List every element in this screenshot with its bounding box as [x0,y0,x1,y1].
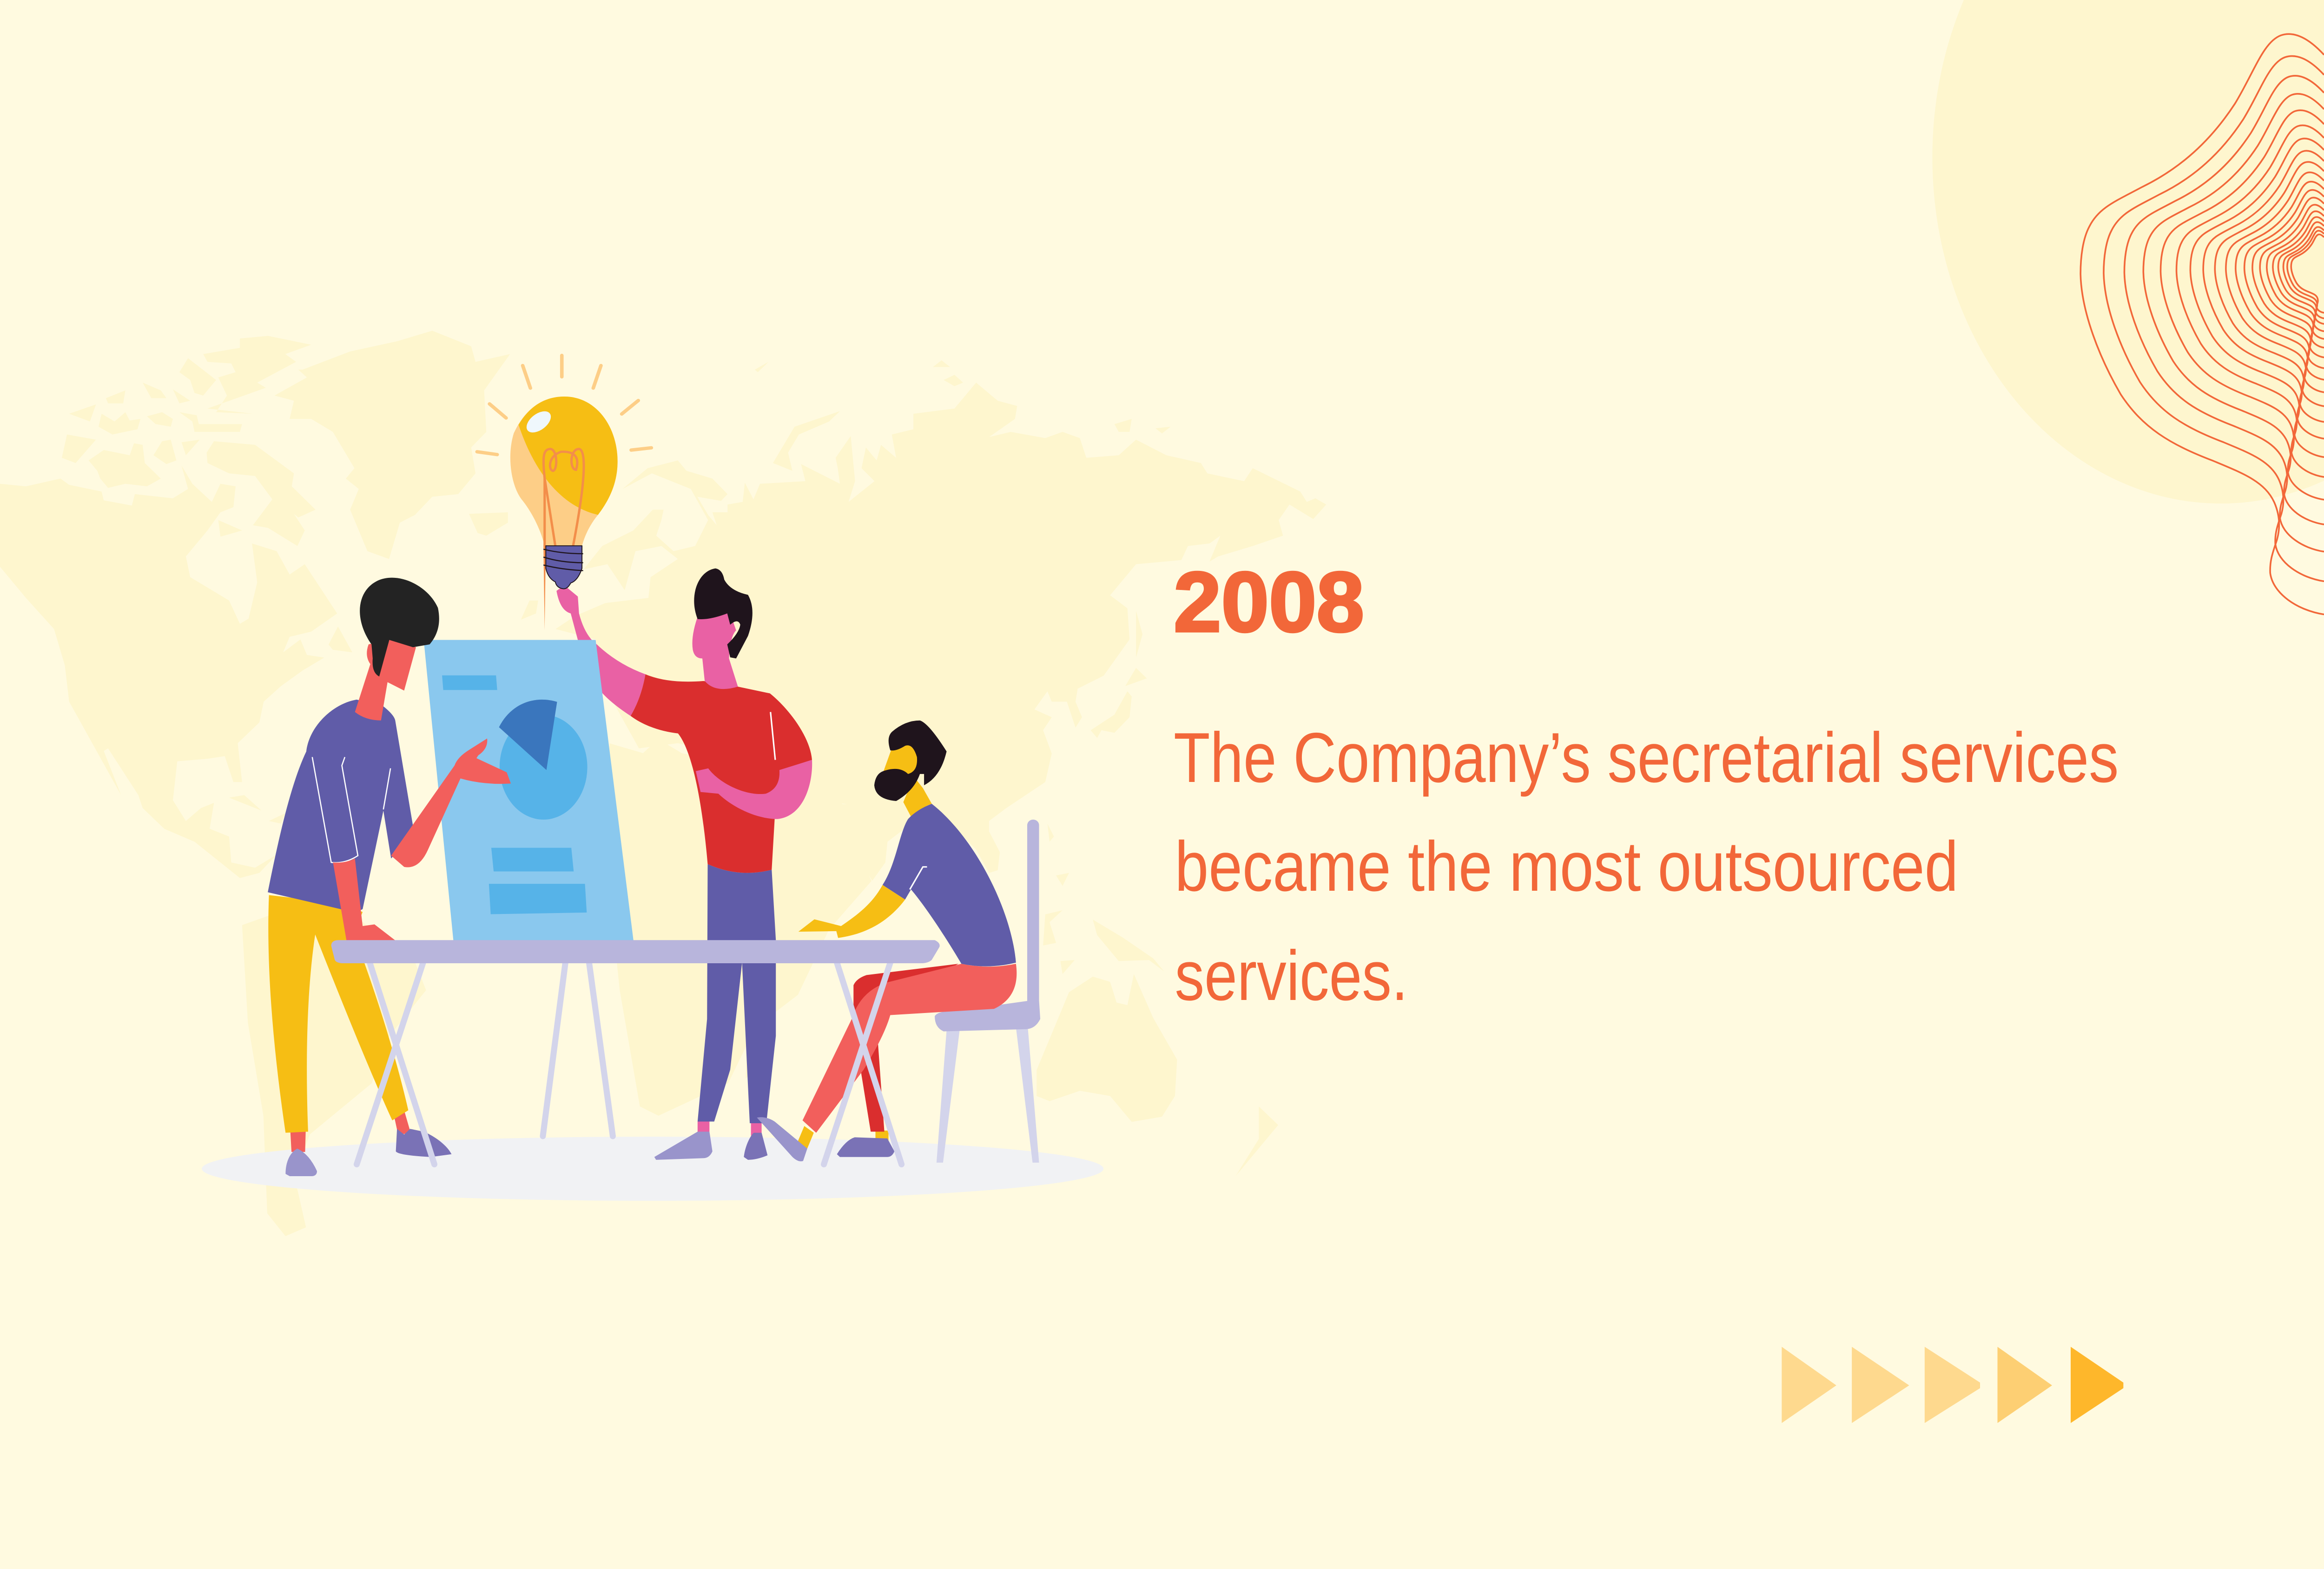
shirt line [771,712,775,760]
map: South America [242,907,426,1236]
raised arm of standing man [556,585,646,716]
progress arrows [1782,1347,2123,1423]
sleeve line [910,867,927,889]
chair back [1027,820,1039,1011]
hair and beard [874,721,947,801]
man on the left [268,578,511,1176]
bulb rays [477,356,651,455]
ground shadow [202,1137,1103,1201]
ankles [797,1126,889,1149]
world map [0,331,1326,1236]
map: Indonesia [1043,910,1164,974]
shirt sleeve lines [312,757,390,863]
map: Arctic islands [62,336,352,824]
map: Japan and Pacific islands [755,360,1171,886]
map: New Zealand [1235,1106,1278,1176]
lower arm on table [333,859,396,941]
line 1: The Company’s secretarial services [1174,718,2119,797]
ankles [698,1121,762,1136]
decorative circle [1932,0,2324,503]
line 3: services. [1175,936,1408,1015]
folded arm [696,760,812,819]
map: Madagascar [746,1023,761,1079]
pie slice [499,700,557,770]
table top [331,940,940,963]
face [883,743,920,777]
bulb glass [510,397,618,546]
illustration: team around a board [268,356,1040,1176]
back leg [853,964,958,1132]
contour line pattern [2080,34,2324,615]
map: Eurasia [555,383,1326,880]
trousers [268,895,408,1133]
front shoe [757,1117,807,1161]
bulb highlight [522,407,555,437]
map: Scandinavia [773,411,840,471]
back shoe [837,1137,894,1157]
bulb socket [546,546,582,589]
arrow 1 [1782,1347,1836,1423]
trousers [698,864,776,1123]
line 2: became the most outsourced [1175,827,1958,906]
presentation board [424,640,635,963]
front leg [803,964,1017,1133]
map: Australia [1037,974,1177,1122]
seated man [757,721,1017,1161]
chair legs [937,1027,1039,1163]
neck [903,777,932,819]
map: North America [0,466,337,878]
neck and face [355,639,416,721]
ankles [290,1110,410,1152]
left shoe [285,1149,317,1176]
hair [360,578,439,676]
bulb filament [543,449,584,546]
map: Africa [601,739,872,1116]
board panel [424,640,635,963]
right shoe [396,1129,452,1157]
left shoe [654,1132,713,1160]
map: Greenland [275,331,510,559]
board bars [442,675,587,914]
t-shirt [883,804,1016,967]
red shirt [631,674,812,873]
pie chart [500,715,588,820]
arrow 5 [2071,1347,2123,1423]
bulb stem line [543,478,546,630]
table [331,940,940,1165]
bulb glow [519,397,618,515]
chair [935,820,1040,1163]
standing man [631,569,812,1160]
head and neck [693,613,738,689]
chair seat [935,1001,1040,1032]
arrow 2 [1852,1347,1909,1423]
arm [799,885,905,938]
arrow 3 [1925,1347,1980,1423]
socket threads [543,549,583,570]
icon: light bulb [477,356,651,630]
map: Iceland and Britain [469,512,538,620]
arrow 4 [1998,1347,2052,1423]
hair [694,569,753,658]
t-shirt [268,700,414,912]
pointing arm [391,738,511,867]
right shoe [744,1133,767,1160]
table legs [357,963,902,1165]
body text [1174,718,2119,1015]
year heading: 2008 [1174,555,1364,649]
